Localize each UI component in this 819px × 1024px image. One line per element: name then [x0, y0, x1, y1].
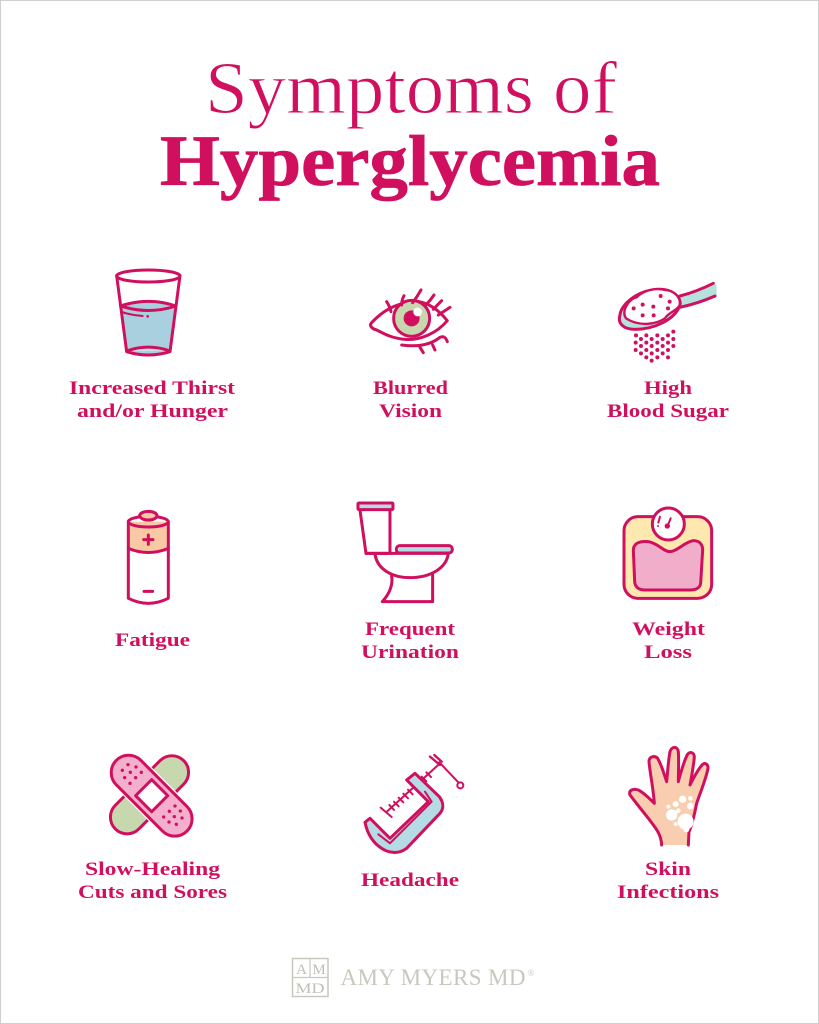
label: Vision: [379, 401, 443, 422]
label: Slow-Healing: [85, 859, 221, 880]
title: [160, 48, 660, 201]
icon: toilet: [358, 503, 452, 602]
title: Symptoms of: [205, 48, 617, 130]
panel: fatigue: [115, 511, 190, 651]
label: Infections: [617, 882, 719, 903]
label: Fatigue: [115, 630, 190, 651]
logo: Amy Myers MD: [292, 958, 535, 997]
label: and/or Hunger: [77, 401, 229, 422]
label: Urination: [361, 642, 460, 663]
label: [632, 619, 706, 663]
label: Headache: [361, 870, 459, 891]
label: [617, 859, 719, 903]
label: Blood Sugar: [607, 401, 730, 422]
logo mark: M: [312, 962, 326, 978]
label: [373, 378, 449, 422]
label: Cuts and Sores: [78, 882, 227, 903]
icon: crossed bandages: [101, 745, 202, 846]
label: Increased Thirst: [69, 378, 236, 399]
icon: c-clamp: [365, 755, 463, 852]
logo mark: A: [296, 962, 307, 978]
panel: slow-healing cuts and sores: [78, 745, 227, 903]
icon: hand with rash: [630, 747, 708, 845]
label: Weight: [632, 619, 706, 640]
label: Frequent: [365, 619, 456, 640]
wordmark: ®: [528, 968, 535, 978]
panel: skin infections: [617, 747, 719, 903]
wordmark: AMY MYERS MD: [340, 965, 526, 990]
logo mark: MD: [296, 981, 325, 997]
label: Blurred: [373, 378, 449, 399]
panel: blurred vision: [371, 290, 450, 422]
logo mark: [292, 958, 328, 997]
label: [69, 378, 236, 422]
label: [607, 378, 730, 422]
icon: glass of water: [117, 270, 180, 355]
label: Loss: [644, 642, 692, 663]
icon: eye: [371, 290, 450, 353]
icon: battery: [128, 511, 168, 603]
label: Skin: [645, 859, 692, 880]
label: [361, 619, 460, 663]
icon: bathroom scale: [624, 508, 712, 598]
panel: increased thirst and/or hunger: [69, 270, 236, 422]
panel: high blood sugar: [607, 283, 730, 422]
title: Hyperglycemia: [160, 121, 660, 201]
label: High: [644, 378, 693, 399]
panel: frequent urination: [358, 503, 460, 663]
panel: weight loss: [624, 508, 712, 663]
panel: headache: [361, 755, 463, 891]
icon: spoon with sugar: [619, 283, 717, 363]
label: [78, 859, 227, 903]
